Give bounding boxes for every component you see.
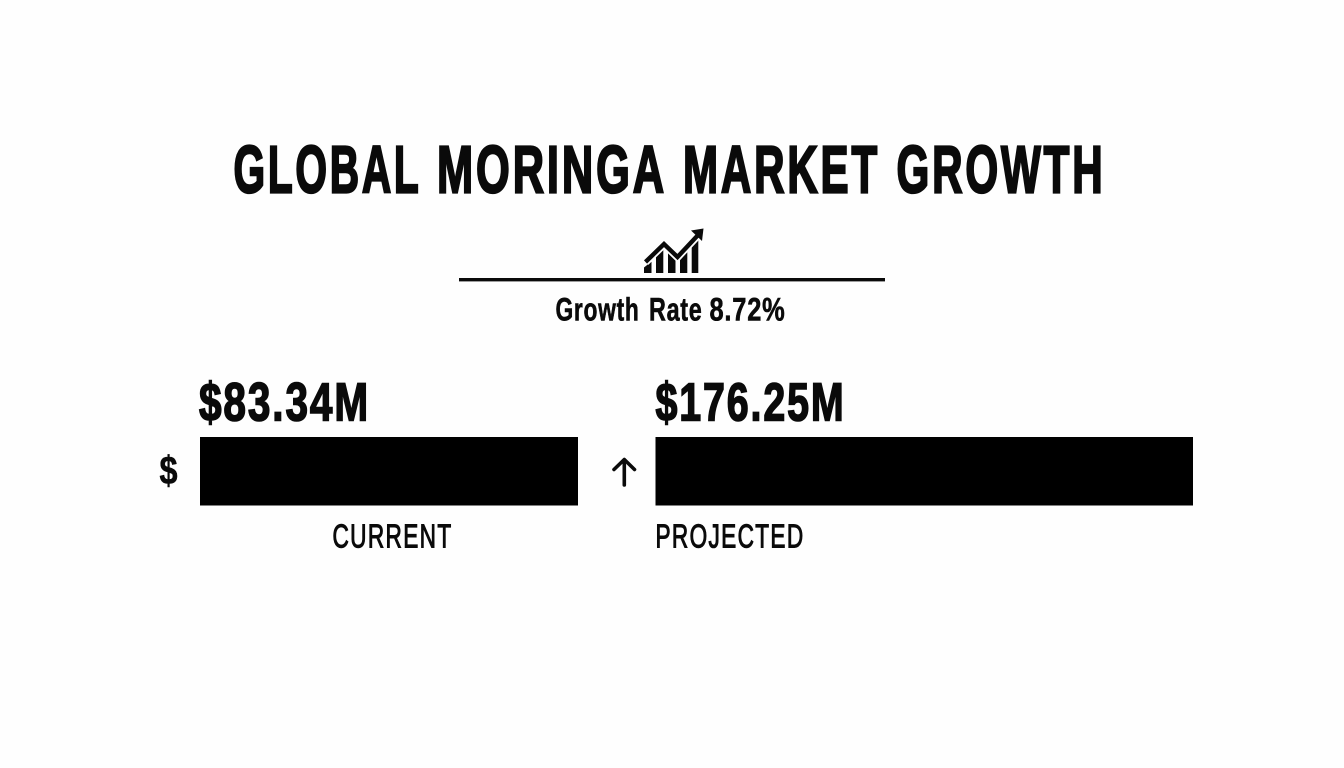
panel: current market value [160, 374, 578, 556]
title: GROWTH [896, 132, 1106, 208]
current value: $83.34M [199, 374, 370, 432]
current bar [200, 437, 578, 506]
growth rate label: 8.72% [710, 292, 786, 328]
title: MARKET [683, 132, 880, 208]
current label: CURRENT [332, 518, 452, 556]
panel: projected market value [614, 374, 1193, 556]
title [234, 132, 1106, 208]
projected label: PROJECTED [656, 518, 804, 556]
title: GLOBAL [234, 132, 422, 208]
icon: up arrow [614, 460, 634, 485]
projected bar [656, 437, 1193, 506]
title: MORINGA [437, 132, 667, 208]
icon: dollar sign: $ [160, 449, 178, 493]
growth rate label: Growth [556, 292, 640, 328]
divider line [459, 278, 885, 281]
growth rate label: Rate [649, 292, 702, 328]
icon: growth chart with arrow [644, 228, 704, 273]
growth rate label [556, 292, 786, 328]
projected value: $176.25M [656, 374, 846, 432]
